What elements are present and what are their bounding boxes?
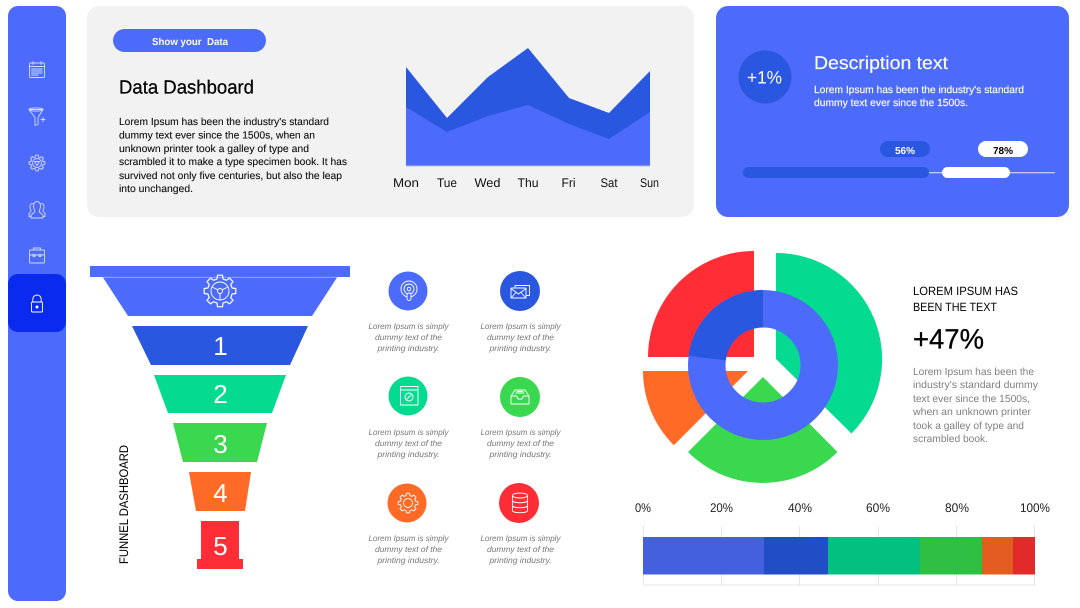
icon: gear wheel xyxy=(29,155,45,171)
bar segments xyxy=(643,537,1035,574)
paragraph: Lorem Ipsum has been the xyxy=(913,367,1034,378)
paragraph: took a galley of type and xyxy=(913,421,1024,432)
text block: intro paragraph: into unchanged. xyxy=(119,184,193,195)
pill: show your data xyxy=(113,29,266,52)
item: podcast xyxy=(368,272,449,353)
item: inbox tray: dummy text of the xyxy=(487,439,554,448)
heading: lorem ipsum xyxy=(913,284,1018,314)
text block: intro paragraph: dummy text ever since the 1500s, when an xyxy=(119,130,315,142)
badge: plus one percent: +1% xyxy=(747,68,782,88)
axis labels: 0% xyxy=(635,501,651,515)
heading: lorem ipsum: BEEN THE TEXT xyxy=(913,300,998,314)
pill: show your data: Show your Data xyxy=(152,37,228,48)
panel: data dashboard xyxy=(87,6,694,217)
icon: gear xyxy=(398,493,418,513)
funnel stage 1: 1 xyxy=(213,331,228,361)
paragraph: text ever since the 1500s, xyxy=(913,394,1030,405)
item: browser window: dummy text of the xyxy=(375,439,442,448)
item: settings gear: printing industry. xyxy=(376,556,440,565)
item: podcast: Lorem Ipsum is simply xyxy=(368,322,449,331)
paragraph: industry's standard dummy xyxy=(913,380,1039,391)
item: settings gear: dummy text of the xyxy=(375,545,442,554)
item: settings gear xyxy=(368,484,449,565)
axis labels: 100% xyxy=(1020,501,1050,515)
axis labels: 20% xyxy=(710,501,733,515)
item: database xyxy=(480,483,561,565)
item: database: printing industry. xyxy=(488,556,552,565)
panel: sidebar navigation xyxy=(8,6,66,601)
label: 56 percent xyxy=(880,141,930,157)
icon: podcast xyxy=(401,281,417,300)
funnel stage 2: 2 xyxy=(213,379,228,409)
text block: intro paragraph: Lorem Ipsum has been the industry's standard xyxy=(119,117,329,128)
axis labels: 40% xyxy=(788,501,812,515)
donut ring xyxy=(707,309,819,421)
item: browser window xyxy=(368,376,449,459)
funnel stage 5 xyxy=(197,521,243,569)
area chart: weekly values xyxy=(393,48,659,190)
funnel stage 4 xyxy=(189,472,251,511)
item: podcast: dummy text of the xyxy=(375,333,442,342)
funnel stage 3 xyxy=(173,423,267,462)
pie slice: red xyxy=(648,251,754,357)
item: browser window: Lorem Ipsum is simply xyxy=(368,428,449,437)
paragraph: scrambled book. xyxy=(913,434,988,445)
item: database: Lorem Ipsum is simply xyxy=(480,534,561,543)
item: browser window: printing industry. xyxy=(376,450,440,459)
badge: plus one percent xyxy=(738,50,792,104)
icon list xyxy=(368,271,561,565)
item: settings gear: Lorem Ipsum is simply xyxy=(368,534,449,543)
icon: envelope xyxy=(511,286,530,298)
text block: description: Lorem Ipsum has been the industry's standard xyxy=(814,85,1024,96)
funnel top rim xyxy=(90,266,350,277)
funnel stage 1 xyxy=(132,326,308,365)
item: envelope: printing industry. xyxy=(488,344,552,353)
funnel stage 3: 3 xyxy=(213,429,228,459)
item: inbox tray: Lorem Ipsum is simply xyxy=(480,428,561,437)
item: envelope xyxy=(480,271,561,353)
chart axis labels: Sun xyxy=(640,176,659,190)
pie slice: teal xyxy=(776,253,882,434)
label: 78 percent xyxy=(978,141,1028,157)
progress bars xyxy=(743,167,1055,178)
chart axis labels: Wed xyxy=(474,176,501,190)
icon: users xyxy=(29,202,45,218)
item: database: dummy text of the xyxy=(487,545,554,554)
icon: steering gear xyxy=(204,275,236,307)
heading: description text: Description text xyxy=(814,52,948,73)
chart axis labels: Mon xyxy=(393,176,419,190)
text block: intro paragraph: scrambled it to make a type specimen book. It has xyxy=(119,157,347,168)
chart axis labels: Thu xyxy=(518,176,539,190)
item: envelope: dummy text of the xyxy=(487,333,554,342)
axis labels: 60% xyxy=(866,501,890,515)
donut segment: dark xyxy=(689,290,763,360)
label: 78 percent: 78% xyxy=(993,146,1013,157)
text block: intro paragraph: survived not only five centuries, but also the leap xyxy=(119,171,342,182)
funnel stage: gear xyxy=(103,275,337,316)
vertical label: funnel dashboard: FUNNEL DASHBOARD xyxy=(117,445,131,564)
item: podcast: printing industry. xyxy=(376,344,440,353)
paragraph xyxy=(912,367,1039,445)
funnel stage 4: 4 xyxy=(213,478,228,508)
axis labels xyxy=(635,501,1050,515)
funnel stage 5: 5 xyxy=(213,531,228,561)
icon: calendar xyxy=(30,62,44,78)
pie slice: green xyxy=(688,377,838,483)
icon: lock xyxy=(32,295,42,312)
label: 56 percent: 56% xyxy=(895,146,915,157)
heading: data dashboard: Data Dashboard xyxy=(119,78,254,98)
statistic: plus 47 percent: +47% xyxy=(913,324,984,354)
stacked bar chart xyxy=(635,501,1050,585)
text block: intro paragraph xyxy=(119,117,347,195)
chart axis labels: Sat xyxy=(600,176,618,190)
axis labels: 80% xyxy=(945,501,969,515)
item: inbox tray: printing industry. xyxy=(488,450,552,459)
funnel stage 2 xyxy=(154,375,286,413)
text block: donut summary xyxy=(912,284,1039,445)
funnel chart xyxy=(90,266,350,569)
item: inbox tray xyxy=(480,377,561,459)
active nav highlight xyxy=(8,274,66,332)
paragraph: when an unknown printer xyxy=(912,407,1032,418)
chart axis labels: Fri xyxy=(562,176,576,190)
chart axis labels: Tue xyxy=(437,176,457,190)
icon: browser xyxy=(400,386,418,405)
icon: inbox xyxy=(511,390,529,404)
icon: briefcase xyxy=(30,248,44,263)
pie slice: orange xyxy=(643,371,748,445)
panel: description card xyxy=(716,6,1069,217)
heading: lorem ipsum: LOREM IPSUM HAS xyxy=(913,284,1018,298)
exploded pie and donut chart xyxy=(643,251,882,483)
text block: description xyxy=(814,85,1024,109)
text block: description: dummy text ever since the 1500s. xyxy=(814,98,968,109)
icon: database xyxy=(512,493,528,513)
icon: funnel plus xyxy=(29,108,45,126)
chart axis labels xyxy=(393,176,659,190)
item: envelope: Lorem Ipsum is simply xyxy=(480,322,561,331)
text block: intro paragraph: unknown printer took a galley of type and xyxy=(119,144,309,155)
